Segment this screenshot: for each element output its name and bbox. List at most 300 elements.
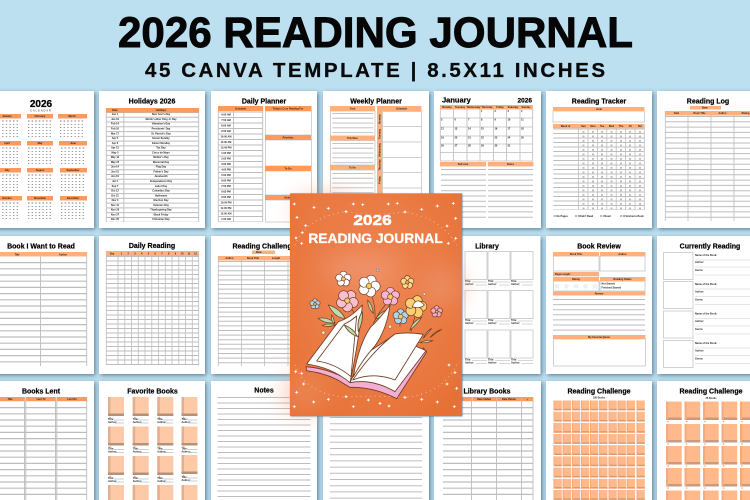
title and author fields: Title: [511,280,517,283]
panel: holidays 2026 [99,91,205,228]
heading: Reading Challenge [232,244,296,250]
schedule column: 7:00 AM [221,119,231,122]
book boxes [664,252,693,368]
sub heading: 25 Books [705,397,717,400]
month headers: October [2,197,12,200]
schedule column: 6:00 AM [221,114,231,116]
reading status [600,277,646,291]
holiday dates: Jan 1 [112,113,119,116]
holiday names: Cinco de Mayo [152,151,170,154]
holiday dates: Apr 6 [112,142,119,145]
card labels: Author: [182,450,191,454]
schedule column: 10:00 PM [221,202,231,204]
panel: reading challenge 100 books [546,381,652,500]
month grid: 3 [508,110,510,113]
schedule column: 7:00 PM [221,185,231,188]
schedule column: 2:00 PM [221,158,231,160]
holiday dates: Nov 26 [111,209,120,212]
holiday dates: Feb 14 [111,123,120,126]
month grid: 22 [481,136,484,140]
month grid: 18 [521,128,524,130]
month grid: 20 [454,136,458,140]
month grid: 21 [468,136,471,140]
grid: 7 [161,252,163,256]
daily schedule: Schedule [396,108,408,110]
daily schedule: Thursday [378,159,382,171]
month grid: 28 [468,144,471,148]
table header: Date [112,109,118,112]
card labels: Title: [108,477,114,480]
holiday dates: Apr 15 [111,147,119,150]
subtitle: 45 CANVA TEMPLATE | 8.5X11 INCHES [145,59,605,82]
card labels: Author: [157,480,166,483]
month grid: 19 [441,136,444,140]
schedule column: 8:00 AM [221,124,231,128]
turning page [353,305,390,377]
holiday dates: Oct 31 [111,194,119,197]
month grid: 15 [481,128,484,130]
sub heading: 100 Books [593,396,606,400]
month grid [440,105,533,161]
dotted sparkle arcs [295,212,457,397]
date bar: Date: [702,107,708,110]
schedule column [218,106,263,222]
holiday names: Independence Day [150,180,173,183]
month grid: 5 [441,118,443,122]
panel: currently reading [657,236,750,374]
month headers: April [4,142,10,145]
month grid: 14 [468,128,471,130]
card labels: Author: [108,421,117,424]
left inner page [317,316,357,377]
book details: Author: [695,350,704,352]
main title: 2026 READING JOURNAL [118,9,633,57]
month grid: Tuesday [455,106,466,109]
title and author fields: Author [618,253,627,256]
daily schedule [377,106,422,220]
holiday names: Martin Luther King Jr. Day [145,118,177,121]
tracker table: Tue [600,125,605,128]
book details: Name of the Book: [695,254,717,257]
tracker table: Sat [638,125,642,128]
grid: 9 [175,252,177,256]
favorite quote: My Favorite Quote [588,336,611,339]
tracker legend: I Didn't Read [578,215,594,218]
month headers: September [67,169,79,172]
grid: 3 [134,252,136,256]
log table: Date [674,112,680,115]
holiday dates: May 25 [111,161,120,164]
heading: Reading Tracker [572,98,627,106]
card labels: Author: [108,480,117,483]
holiday names: Flag Day [156,166,167,169]
panel: january monthly page [434,91,541,228]
goal, priorities and to-do lists: Goal [350,108,356,110]
schedule column: 11:00 AM [221,141,231,144]
panel: reading challenge table [211,236,317,374]
book details: Genre: [695,358,703,360]
self-care and notes: Notes [507,163,515,166]
schedule column: 4:00 PM [221,168,231,172]
daily schedule: Tuesday [378,128,382,139]
rating stars: ☆ [583,282,589,290]
tracker legend: I Read [603,215,611,218]
month grid: Monday [442,106,452,109]
holiday names: Black Friday [154,213,169,216]
grid: 4 [141,252,143,256]
heading: Currently Reading [680,244,740,250]
heading: Book I Want to Read [7,244,75,250]
month headers: December [67,197,79,200]
schedule column: 8:00 PM [221,190,231,194]
month headers: May [38,142,43,145]
schedule column: 11:00 PM [221,207,231,210]
card labels: Author: [157,450,166,454]
month grid: 13 [454,128,458,130]
table: Date Return [502,398,517,401]
card labels: Title: [157,448,163,450]
daily schedule: Monday [378,114,382,124]
month grid: 10 [508,118,511,122]
rating stars: ☆ [592,282,598,290]
holiday names: St. Patrick's Day [151,132,171,135]
log table: Author [718,112,727,115]
heading: Reading Challenge [679,388,743,396]
title and author fields: Title: [488,319,494,322]
month grid: 8 [481,118,483,122]
month headers [0,114,87,200]
tracker table: Fri [629,125,632,128]
panel: journal cover [285,193,462,416]
card labels: Title: [157,418,163,421]
month grid: 17 [508,128,511,130]
title and author fields: Author: [488,362,497,364]
tracker legend: I Finished a Book [623,215,644,218]
book details [695,254,750,364]
title and author fields: Title: [488,280,494,283]
book pink edge [306,348,427,399]
book cover boxes [465,252,533,358]
holiday dates: Dec 25 [111,218,120,221]
heading: Library Books [463,388,511,396]
right column sections: Notes [285,196,292,200]
holiday names: Thanksgiving Day [150,209,172,212]
table [0,252,87,366]
holiday dates: Jan 19 [111,118,119,121]
holiday dates: Sep 7 [112,185,119,188]
month grid: 9 [494,118,496,122]
table: Date Added [477,398,491,401]
grid: 2 [128,252,130,256]
holiday dates: Nov 27 [111,213,120,216]
panel: library [434,236,540,374]
card labels: Title: [133,418,139,421]
tracker table: Wed [609,125,615,128]
reading status: Finished Started [602,286,622,290]
heading: Books Lent [22,388,61,396]
title and author fields: Title: [465,319,471,322]
book grid [666,402,750,500]
table: Author [225,257,234,260]
table: Title [7,398,13,401]
tracker table: Mon [590,125,596,128]
table header [106,108,199,112]
title and author fields: Title: [465,358,471,362]
month headers: July [4,169,10,172]
title and author fields: Author: [465,322,474,325]
holiday names: Halloween [155,194,168,197]
month grid: 2 [494,110,496,113]
card labels: Title: [108,448,114,450]
title and author fields: Title: [511,319,517,322]
month headers: August [36,169,44,172]
holiday dates: Jun 14 [111,166,120,169]
schedule column: 12:00 PM [221,146,231,150]
daily schedule: Wednesday [378,142,382,157]
page length: Page Length: [555,273,571,276]
month date grids [0,121,86,218]
grid: 5 [148,252,150,256]
sparkles bottom border [292,363,459,409]
heading: Favorite Books [127,388,178,396]
bookmark leaves [344,312,362,337]
holiday names: Labor Day [155,185,168,188]
title and author fields: Author: [511,283,520,286]
month grid: Thursday [481,106,493,109]
month grid: 6 [454,118,456,122]
heading: Library [475,244,499,250]
schedule column: Schedule [235,108,247,110]
card labels: Author: [133,480,142,483]
card labels: Author: [182,479,191,482]
book details: Author: [695,261,704,264]
log table [665,111,750,221]
holiday names: Father's Day [154,170,169,173]
illustration: stems and leaves [318,292,442,343]
log table: Book Title [693,112,706,115]
rating stars [553,277,599,291]
holiday names: New Year's Day [152,113,171,116]
panel: weekly planner [323,91,429,228]
title and author fields: Title: [511,358,517,362]
tracker legend: No Pages [556,215,569,218]
book details: Name of the Book: [695,283,717,286]
book details: Genre: [695,269,703,272]
title and author fields: Title: [488,358,494,362]
card labels: Title: [157,477,163,480]
card labels: Title: [108,418,114,421]
ruled lines [218,397,310,500]
holiday names: Columbus Day [152,190,170,193]
table rows [106,112,199,222]
date bar: Date: [256,251,262,254]
month headers: March [68,115,76,118]
table: Author [59,253,67,256]
goal, priorities and to-do lists: Priorities [347,137,359,140]
card labels: Title: [182,476,188,479]
rating stars: ☆ [564,282,570,290]
panel: book review [546,236,652,374]
book details: Genre: [695,328,703,331]
heading: Holidays 2026 [129,98,175,106]
schedule column: 12:00 AM [221,212,231,216]
book details: Author: [695,320,704,323]
holiday dates: Jul 4 [112,180,118,183]
tracker legend [554,215,644,218]
month grid: 16 [494,128,498,130]
goal, priorities and to-do lists [330,106,375,220]
holiday dates: May 10 [111,156,120,159]
panel: notes [211,381,317,500]
grid: 8 [168,252,170,256]
title and author fields: Author: [488,283,497,286]
holiday names: Tax Day [156,147,166,150]
right inner page [353,333,423,380]
right column sections: Today's Core Reading For [273,108,303,110]
holiday dates: Nov 3 [112,199,119,202]
book details: Genre: [695,298,703,302]
table [218,256,310,366]
month grid: 23 [494,136,498,140]
heading: Notes [254,388,274,394]
title and author fields: Author: [465,362,474,364]
book details: Author: [695,290,704,294]
schedule column: 1:00 AM [221,218,231,221]
right column sections: Priorities [283,136,294,140]
grid: 11 [188,252,191,256]
sparkles top border [292,201,458,245]
title and author fields [553,252,646,271]
grid [106,251,199,365]
watercolor texture [285,197,462,413]
illustration: open book [306,305,427,399]
calendar label: CALENDAR [30,110,52,112]
table: ✓ [526,398,529,401]
card labels: Title: [133,477,139,480]
heading: Reading Log [687,98,729,106]
left page [307,305,362,383]
panel: library books [434,381,541,500]
grid: Day [110,252,115,256]
title and author fields: Author: [511,362,520,364]
calendar year: 2026 [30,99,53,110]
right column sections: To-Do [284,168,292,170]
title and author fields: Book Title [570,253,583,256]
holiday dates: Jun 21 [111,170,120,173]
holiday names: Valentine's Day [152,123,171,126]
panel: reading log [657,91,750,228]
book cards [108,397,198,500]
goal box: Goal [596,108,602,111]
heading: Daily Reading [129,243,175,250]
title and author fields: Author: [465,283,474,286]
reading status: Reading Status [613,278,632,281]
rating stars: ☆ [573,282,579,290]
schedule column: 9:00 AM [221,130,231,133]
schedule column: 9:00 PM [221,196,231,199]
tracker table: Week of [561,125,570,128]
holiday names: Election Day [153,199,169,202]
card labels: Title: [133,448,139,450]
holiday dates: Mar 17 [111,132,120,135]
month grid: Sunday [521,106,531,109]
holiday dates: May 5 [112,151,119,154]
title and author fields: Author: [488,322,497,325]
month grid: 11 [521,118,524,122]
month grid: 26 [441,144,444,148]
schedule column: 3:00 PM [221,163,231,166]
table header: Holidays [156,109,167,112]
panel: hidden lined sheet [323,381,429,500]
month headers: January [2,115,12,118]
grid: 6 [155,252,157,256]
card labels: Title: [182,418,188,421]
card labels: Author: [133,450,142,454]
month grid: 31 [508,144,511,148]
month grid: 7 [468,118,470,122]
month grid: 25 [521,136,524,140]
title and author fields [465,280,533,364]
month headers: June [70,142,77,145]
holiday dates: Jun 19 [111,175,120,178]
month headers: November [34,197,46,200]
cover year: 2026 [353,212,392,229]
month grid: 30 [494,144,498,148]
card labels: Author: [133,421,142,424]
daily schedule: Friday [378,176,382,184]
panel: daily planner [211,91,317,228]
table [0,397,87,500]
holiday names: Easter Sunday [152,137,170,140]
month grid: Saturday [508,106,519,109]
holiday names: Veterans Day [153,204,169,207]
reading status: Not Started [602,282,615,286]
tracker table [553,124,644,210]
holiday names: Christmas Day [152,218,170,221]
month grid: 27 [454,144,458,148]
card labels: Author: [108,450,117,454]
table: Length [272,257,281,260]
year heading: 2026 [518,98,532,104]
table lines [330,417,422,500]
book details: Name of the Book: [695,342,717,345]
panel: books lent [0,381,94,500]
goal, priorities and to-do lists: To-Do [349,166,356,170]
month grid: 4 [521,110,523,113]
panel: favorite books [99,381,205,500]
panel: 2026 calendar [0,91,94,228]
review lines: Review [595,292,603,296]
heading: Weekly Planner [350,98,402,106]
card labels: Author: [182,421,191,424]
month grid: Friday [496,106,504,109]
card labels: Author: [157,421,166,424]
right column sections [265,106,312,222]
schedule column: 1:00 PM [221,152,231,155]
panel: book i want to read [0,236,94,374]
month grid: 1 [481,110,483,113]
title and author fields: Title: [465,280,471,283]
schedule column: 6:00 PM [221,180,231,182]
schedule column: 10:00 AM [221,136,231,138]
card labels: Title: [182,448,188,450]
month grid: 29 [481,144,484,148]
holiday names: Mother's Day [153,156,169,159]
table: Lent On [67,398,77,401]
heading: Reading Challenge [567,388,631,396]
grid: 10 [181,252,184,256]
schedule column: 5:00 PM [221,174,231,177]
